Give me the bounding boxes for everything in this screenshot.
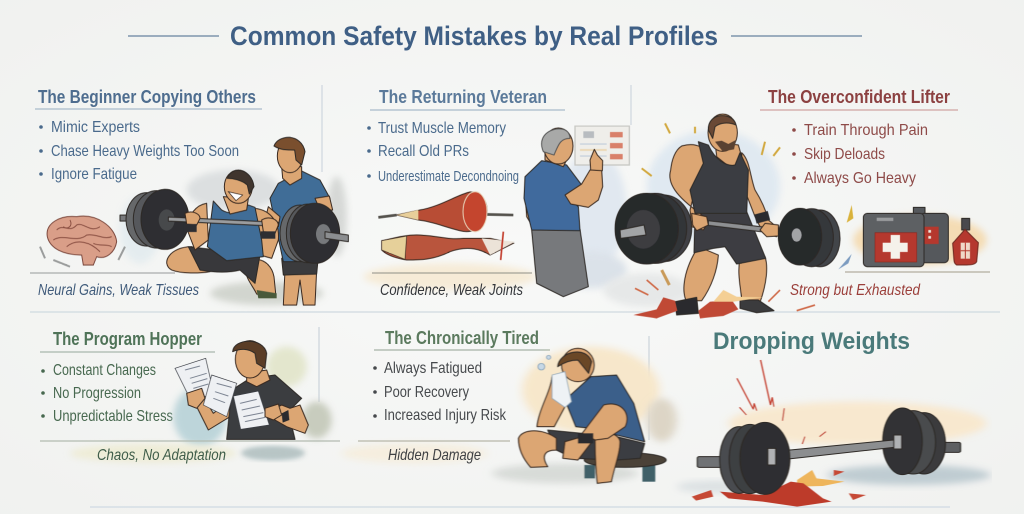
illustration: veteran and muscles	[363, 126, 629, 297]
bullet list: hopper: No Progression	[53, 385, 141, 402]
illustration: hopper with papers	[70, 341, 332, 463]
heading: overconfident: The Overconfident Lifter	[768, 87, 950, 107]
bullet list: beginner: Mimic Experts	[51, 119, 140, 136]
hopper figure	[193, 341, 308, 439]
bullet list: beginner: Ignore Fatigue	[51, 166, 137, 183]
heading: veteran: The Returning Veteran	[379, 87, 547, 107]
panel: the program hopper	[40, 329, 340, 464]
bullet list: hopper	[41, 362, 173, 425]
bench	[584, 453, 666, 482]
bullet list: overconfident	[792, 122, 928, 187]
caption: overconfident: Strong but Exhausted	[790, 282, 921, 299]
impact lines	[737, 360, 826, 444]
panel: the chronically tired	[341, 328, 677, 483]
illustration: lifter deadlift	[603, 114, 987, 318]
spotter	[267, 137, 333, 305]
papers	[175, 358, 269, 429]
bullet list: overconfident: Train Through Pain	[804, 122, 928, 139]
bullet list: beginner: Chase Heavy Weights Too Soon	[51, 143, 239, 160]
bullet list: hopper: Constant Changes	[53, 362, 156, 379]
tired figure	[519, 348, 645, 483]
caption: hopper: Chaos, No Adaptation	[97, 447, 226, 464]
bullet list: hopper: Unpredictable Stress	[53, 408, 173, 425]
title: Common Safety Mistakes by Real Profiles	[230, 21, 718, 51]
bullet list: overconfident: Skip Deloads	[804, 146, 885, 163]
right plates and bar	[773, 408, 961, 475]
bullet list: beginner	[39, 119, 239, 183]
heading: tired: The Chronically Tired	[385, 328, 539, 348]
veteran figure	[524, 128, 603, 297]
panel: the overconfident lifter	[603, 87, 990, 318]
bullet list: tired: Always Fatigued	[384, 360, 482, 377]
bullet list: tired	[373, 360, 507, 424]
illustration: tired man on bench	[341, 347, 677, 483]
illustration: beginner squat with spotter	[40, 137, 348, 305]
chart on wall	[575, 126, 629, 165]
muscle diagrams	[378, 192, 515, 260]
squatter	[167, 170, 278, 298]
hands	[187, 388, 282, 420]
bullet list: veteran	[367, 120, 519, 185]
left plates	[697, 422, 790, 494]
lifter figure	[670, 114, 778, 315]
heading: hopper: The Program Hopper	[53, 329, 202, 349]
panel: the returning veteran	[363, 87, 629, 299]
caption: tired: Hidden Damage	[388, 447, 481, 464]
bullet list: veteran: Trust Muscle Memory	[378, 120, 506, 137]
bullet list: tired: Increased Injury Risk	[384, 407, 507, 424]
bullet list: veteran: Recall Old PRs	[378, 143, 469, 160]
bullet list: overconfident: Always Go Heavy	[804, 170, 916, 187]
panel: the beginner copying others	[30, 87, 348, 305]
red and orange splash	[692, 470, 866, 507]
icon: brain	[40, 216, 125, 267]
bullet list: veteran: Underestimate Decondnoing	[378, 168, 519, 185]
caption: beginner: Neural Gains, Weak Tissues	[38, 282, 199, 299]
barbell	[120, 189, 348, 263]
caption: veteran: Confidence, Weak Joints	[380, 282, 523, 299]
red splash	[633, 123, 853, 318]
barbell	[615, 193, 840, 267]
illustration: dropped barbell	[677, 360, 991, 507]
heading: beginner: The Beginner Copying Others	[38, 87, 256, 107]
bullet list: tired: Poor Recovery	[384, 384, 469, 401]
heading: dropping weights: Dropping Weights	[713, 328, 910, 355]
panel: dropping weights	[677, 328, 991, 507]
icon: first aid kit and bottle	[863, 207, 978, 267]
